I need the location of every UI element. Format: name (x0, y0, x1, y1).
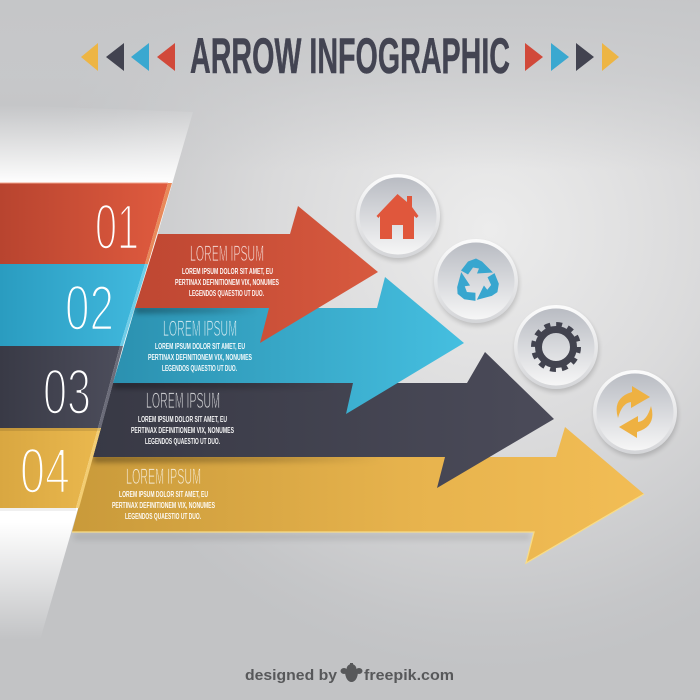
text block: LOREM IPSUM (126, 464, 201, 489)
icon badge: recycle (434, 239, 519, 326)
arrow 4: yellow (72, 427, 644, 563)
text block (112, 464, 215, 521)
icon badge: house (356, 174, 441, 261)
left triangles (81, 43, 175, 71)
text block (175, 241, 279, 298)
text block (148, 316, 252, 373)
icon badge: refresh (593, 370, 678, 457)
icon: gear (534, 325, 578, 369)
text block: PERTINAX DEFINITIONEM VIX, NONUMES (131, 426, 234, 435)
text block: LEGENDOS QUAESTIO UT DUO. (189, 289, 264, 298)
text block: LOREM IPSUM (190, 241, 264, 266)
number: 02 (65, 272, 114, 344)
icon badge: gear (514, 305, 599, 392)
band 1: red (0, 183, 172, 264)
icon: house (376, 194, 418, 239)
text block: LOREM IPSUM DOLOR SIT AMET, EU (138, 415, 227, 424)
number: 03 (43, 356, 91, 428)
text block: LOREM IPSUM DOLOR SIT AMET, EU (119, 490, 208, 499)
text block: PERTINAX DEFINITIONEM VIX, NONUMES (175, 278, 279, 287)
title row (81, 28, 619, 84)
text block: LEGENDOS QUAESTIO UT DUO. (145, 437, 220, 446)
text block: LOREM IPSUM DOLOR SIT AMET, EU (182, 267, 273, 276)
text block: LOREM IPSUM DOLOR SIT AMET, EU (155, 342, 245, 351)
right triangles (525, 43, 619, 71)
icon: refresh arrows (617, 386, 652, 438)
band 4: yellow (0, 428, 101, 511)
text block (131, 388, 234, 446)
arrow 1: red (135, 206, 378, 343)
text block: LEGENDOS QUAESTIO UT DUO. (162, 364, 237, 373)
arrow 3: dark (93, 352, 554, 488)
band 3: dark (0, 346, 123, 428)
footer credit: designed by (245, 667, 338, 684)
arrow 2: blue (113, 277, 464, 414)
icon: freepik logo (340, 663, 362, 682)
number: 01 (95, 191, 139, 263)
text block: LOREM IPSUM (163, 316, 237, 341)
white slanted panel (0, 105, 193, 640)
footer credit: freepik.com (364, 667, 454, 684)
text block: PERTINAX DEFINITIONEM VIX, NONUMES (148, 353, 252, 362)
text block: LOREM IPSUM (146, 388, 220, 413)
text block: PERTINAX DEFINITIONEM VIX, NONUMES (112, 501, 215, 510)
text block: LEGENDOS QUAESTIO UT DUO. (125, 512, 201, 521)
icon: recycle arrows (449, 258, 505, 307)
footer credit (245, 663, 454, 684)
number: 04 (20, 435, 70, 507)
band 2: blue (0, 264, 148, 346)
